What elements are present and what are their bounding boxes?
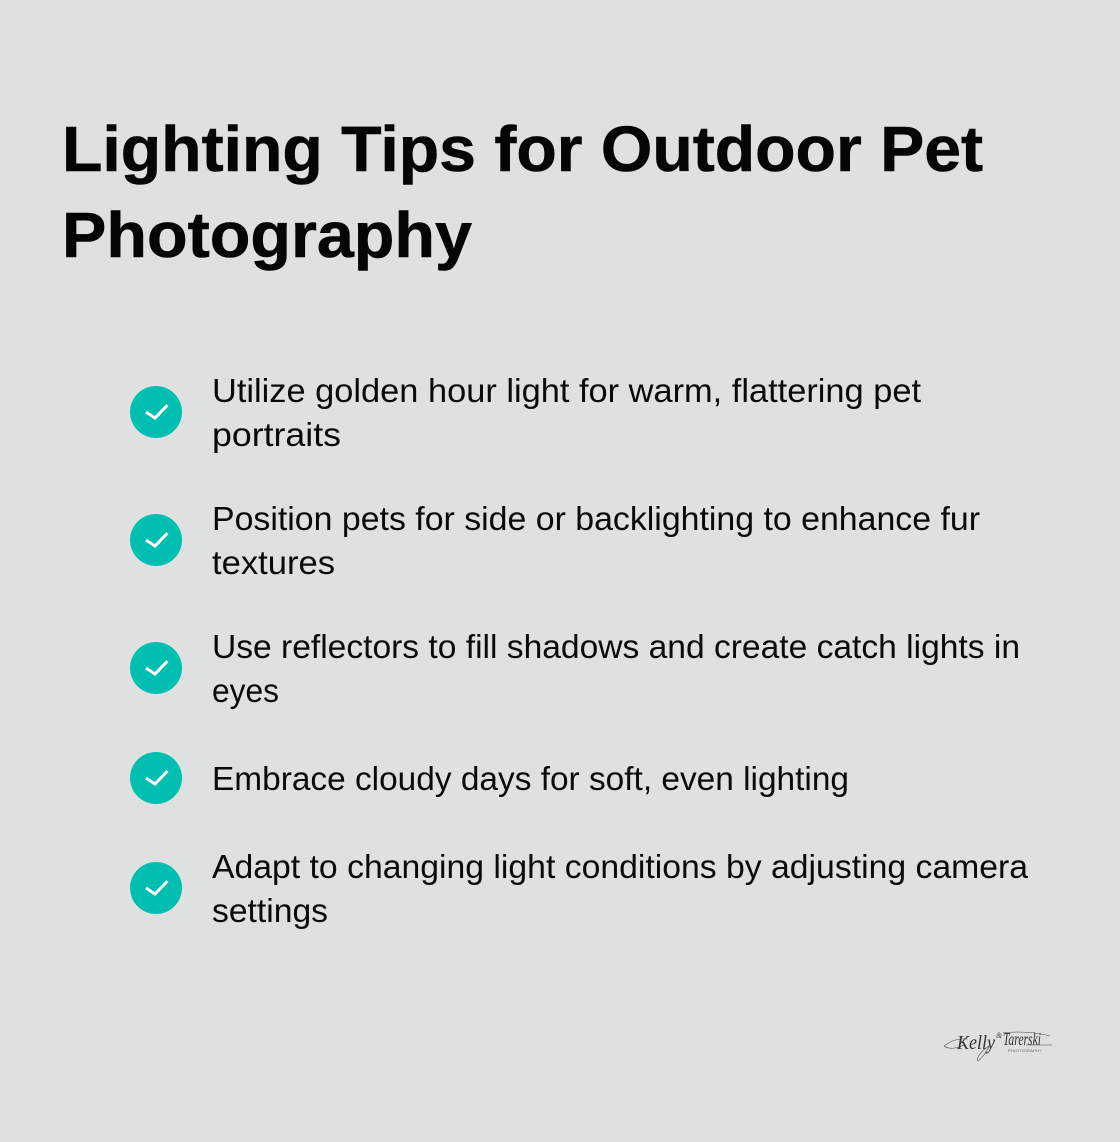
logo: signature: PHOTOGRAPHY — [1008, 1049, 1043, 1053]
tip 5 text: settings — [212, 892, 328, 929]
tip 2 text: Position pets for side or backlighting to enhance fur — [212, 500, 980, 537]
tip 1 text: Utilize golden hour light for warm, flattering pet — [212, 372, 921, 409]
tip 2 — [130, 500, 980, 581]
title: Lighting Tips for Outdoor Pet — [62, 113, 983, 185]
tip 2 text — [212, 500, 980, 581]
icon: check 3 — [130, 642, 182, 694]
tip 5 — [130, 848, 1029, 929]
tip 5 text: Adapt to changing light conditions by adjusting camera — [212, 848, 1029, 885]
tip 3 text: Use reflectors to fill shadows and create catch lights in — [212, 628, 1020, 665]
icon: check 1 — [130, 386, 182, 438]
checklist — [130, 372, 1029, 929]
tip 2 text: textures — [212, 544, 335, 581]
logo: signature: Kelly — [956, 1032, 995, 1054]
tip 3 — [130, 628, 1020, 709]
title: Photography — [62, 199, 472, 271]
tip 1 text — [212, 372, 921, 453]
logo: signature — [944, 1029, 1052, 1061]
logo: signature: Tarerski — [1003, 1029, 1041, 1049]
tip 4 — [130, 752, 849, 804]
icon: check 5 — [130, 862, 182, 914]
tip 3 text — [212, 628, 1020, 709]
tip 4 text: Embrace cloudy days for soft, even lighting — [212, 760, 849, 797]
title — [62, 113, 983, 271]
icon: check 4 — [130, 752, 182, 804]
icon: check 2 — [130, 514, 182, 566]
tip 1 — [130, 372, 921, 453]
logo: signature: & — [996, 1031, 1003, 1040]
tip 1 text: portraits — [212, 416, 341, 453]
tip 5 text — [212, 848, 1029, 929]
tip 3 text: eyes — [212, 672, 279, 709]
